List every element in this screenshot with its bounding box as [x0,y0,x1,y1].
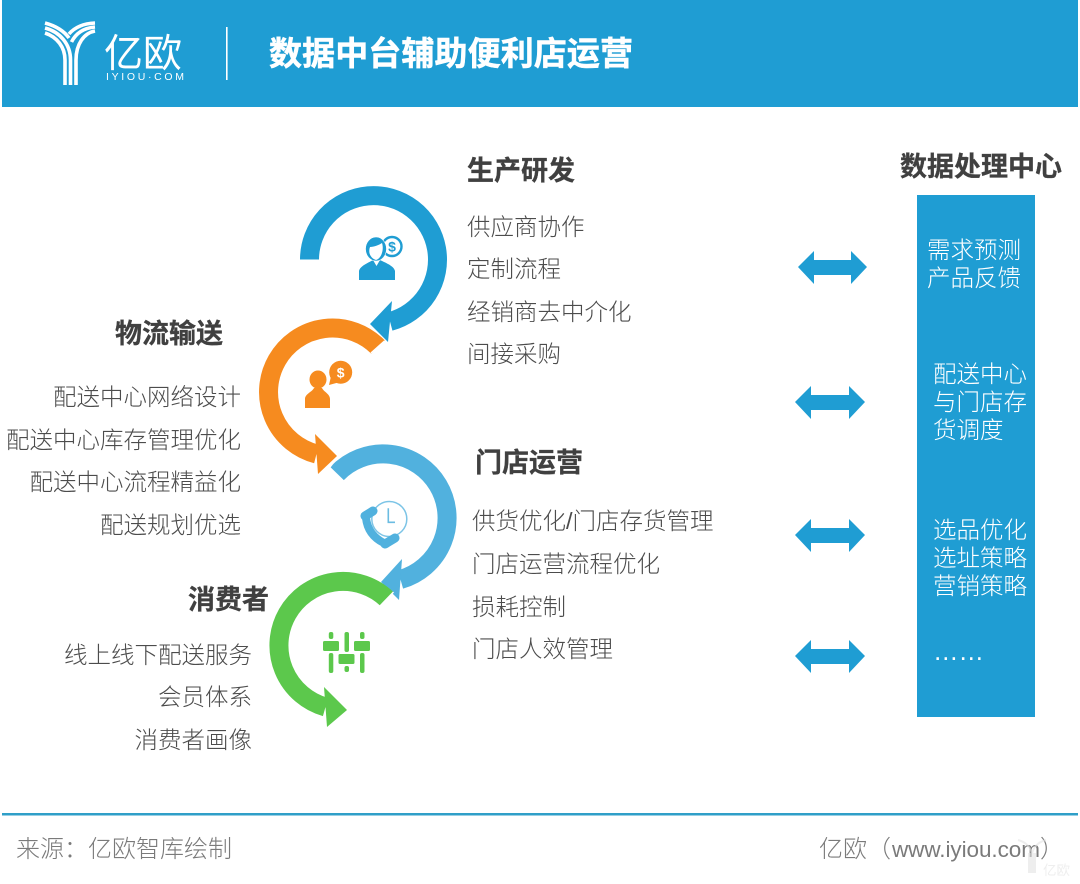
icon: businessman with dollar: $ [388,238,396,254]
watermark [1018,840,1070,878]
arrow: double 2 [795,386,865,419]
panel: data center [917,195,1035,717]
block: consumer [64,585,269,753]
arrow: double 3 [795,519,865,552]
icon: person with dollar bubble: $ [337,364,345,380]
block: consumer: 消费者画像 [134,727,252,753]
panel: data center: 产品反馈 [927,265,1021,291]
icon: phone and clock [365,502,407,544]
panel: data center: 营销策略 [933,573,1027,599]
logo [45,23,184,85]
block: production R&D: 供应商协作 [467,214,584,240]
arc: light blue, store [330,454,447,600]
block: store operation [472,448,714,662]
footer: site: 亿欧（ [819,836,891,863]
logo: 亿欧 [104,33,182,76]
arc: green, consumer [279,581,394,727]
heading: data center: 数据处理中心 [900,152,1062,182]
block: store operation: 门店运营流程优化 [472,551,660,577]
block: store operation: 供货优化/门店存货管理 [472,508,714,534]
footer: site [819,836,1064,863]
block: logistics list: 配送中心流程精益化 [30,469,241,495]
block: production R&D: 定制流程 [467,256,561,282]
panel: data center: 选址策略 [933,545,1027,571]
block: consumer: 线上线下配送服务 [64,642,252,668]
arrow: double 1 [798,251,867,284]
block: consumer: 会员体系 [158,684,252,710]
block: production R&D: 经销商去中介化 [467,299,632,325]
panel: data center: 货调度 [933,417,1004,443]
block: logistics list [6,384,241,538]
block: logistics list: 配送中心库存管理优化 [6,427,241,453]
icon: person with dollar bubble [305,361,352,408]
block: logistics list: 配送规划优选 [100,512,241,538]
panel: data center: 选品优化 [933,517,1027,543]
logo: IYIOU·COM [106,71,184,83]
block: store operation: 门店运营 [475,448,583,478]
panel: data center: 与门店存 [933,389,1027,415]
block: store operation: 损耗控制 [472,594,566,620]
title: 数据中台辅助便利店运营 [269,35,633,72]
block: production R&D: 间接采购 [467,341,561,367]
block: production R&D [467,156,632,367]
footer: site: www.iyiou.com [891,837,1040,862]
header banner [2,0,1078,107]
panel: data center: 配送中心 [933,361,1027,387]
panel: data center: 需求预测 [927,237,1021,263]
footer: source: 来源：亿欧智库绘制 [16,836,232,863]
block: production R&D: 生产研发 [467,156,575,186]
watermark: 亿欧 [1043,863,1070,878]
arc: blue, production [310,196,437,342]
block: store operation: 门店人效管理 [472,636,613,662]
icon: businessman with dollar [359,237,402,280]
block: logistics list: 配送中心网络设计 [53,384,241,410]
block: consumer: 消费者 [188,585,269,615]
panel: data center: …… [933,638,984,666]
footer: site: ） [1040,836,1064,863]
arrow: double 4 [795,640,865,673]
heading: logistics: 物流输送 [115,319,223,349]
icon: sliders [323,632,370,673]
arc: orange, logistics [269,328,384,474]
